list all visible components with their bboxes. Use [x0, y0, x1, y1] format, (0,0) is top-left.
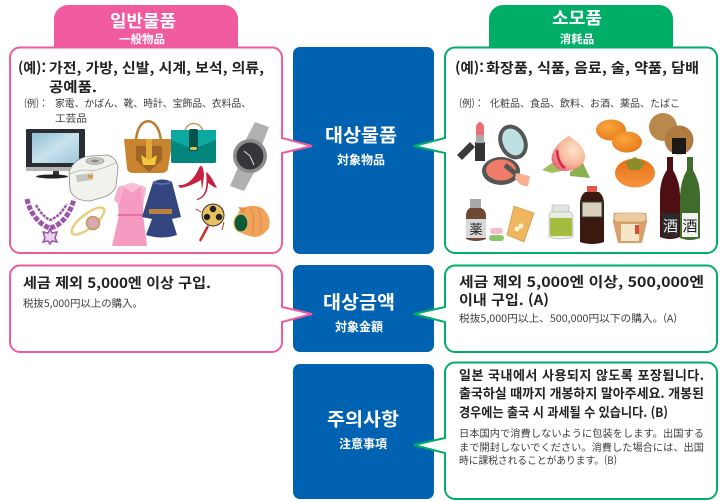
tab: general goods [54, 5, 238, 48]
icon: brown handbag [124, 121, 173, 173]
example text: Korean: 가전, 가방, 신발, 시계, 보석, 의류, [49, 58, 264, 78]
tab: general goods: 일반물품 [110, 7, 176, 32]
precaution text: Korean line 3: 경우에는 출국 시 과세될 수 있습니다. (B) [459, 402, 668, 421]
icon: blue dress [142, 180, 181, 238]
icon: sake bottles [660, 157, 700, 240]
tab: consumables [489, 4, 673, 48]
icon: hand drum toy [196, 204, 224, 241]
panel: consumables precautions [414, 362, 717, 499]
example label: Japanese: (例)： [459, 95, 484, 110]
callout: precautions: 注意事項 [339, 435, 387, 452]
icon: supplement packet [507, 206, 534, 242]
icon: pink dress [112, 183, 147, 246]
precaution text: Japanese line 3: 時に課税されることがあります。(B) [459, 452, 617, 467]
example label: Japanese: (例)： [24, 95, 48, 110]
icon: miso container [613, 213, 647, 243]
callout: precautions: 주의사항 [327, 406, 399, 432]
tab: general goods: 一般物品 [119, 31, 165, 47]
amount text: Korean: 세금 제외 5,000엔 이상 구입. [23, 273, 211, 293]
callout: precautions [293, 364, 434, 499]
icon: wristwatch [230, 122, 269, 191]
icon: mandarin oranges [596, 120, 642, 152]
icon: lipstick [457, 122, 485, 161]
icon: persimmon [615, 157, 655, 188]
panel: general goods target items [10, 48, 312, 253]
tab: consumables: 消耗品 [560, 31, 594, 47]
callout: target amount: 대상금액 [323, 289, 395, 315]
precaution text: Japanese line 1: 日本国内で消費しないように包装をします。出国する [459, 425, 704, 440]
precaution text: Korean line 2: 출국하실 때까지 개봉하지 말아주세요. 개봉된 [459, 383, 704, 402]
callout: target items: 対象物品 [337, 151, 385, 168]
amount text: Japanese: 税抜5,000円以上の購入。 [23, 295, 143, 310]
amount text: Japanese: 税抜5,000円以上、500,000円以下の購入。(A) [459, 310, 677, 325]
icon: rice cooker [69, 155, 118, 201]
icon: sake bottles: 酒 [663, 215, 678, 236]
icon: medicine bottle: 薬 [469, 219, 483, 238]
icon: glass jar [549, 205, 573, 239]
icon: rice crackers [649, 113, 694, 154]
icon: medicine bottle [466, 199, 486, 241]
icon: compact mirror and blush [482, 120, 533, 186]
panel: general goods amount [10, 266, 312, 352]
example text: Japanese: 家電、かばん、靴、時計、宝飾品、衣料品、 [55, 95, 251, 110]
precaution text: Korean line 1: 일본 국내에서 사용되지 않도록 포장됩니다. [459, 365, 704, 384]
icon: red high heels [178, 166, 217, 200]
example text: Korean line 2: 공예품. [49, 77, 97, 97]
panel: consumables target items [414, 48, 717, 253]
icon: soy sauce bottle [580, 186, 604, 244]
example text: Korean: 화장품, 식품, 음료, 술, 약품, 담배 [486, 58, 699, 78]
example text: Japanese line 2: 工芸品 [55, 110, 87, 125]
example label: Korean: (예): [18, 58, 46, 78]
example label: Korean: (예): [455, 58, 484, 78]
amount text: Korean line 1: 세금 제외 5,000엔 이상, 500,000엔 [459, 272, 704, 292]
callout: target items [293, 47, 434, 254]
callout: target items: 대상물품 [325, 122, 397, 148]
callout: target amount: 対象金額 [335, 318, 383, 335]
icon: television [26, 129, 85, 178]
callout: target amount [293, 265, 434, 352]
icon: peach [542, 136, 590, 178]
icon: teal bag [171, 124, 216, 163]
panel: consumables amount [414, 266, 717, 352]
icon: sake bottles: 酒 [682, 215, 698, 236]
icon: ring [68, 203, 108, 239]
precaution text: Japanese line 2: まで開封しないでください。消費した場合には、出国 [459, 439, 704, 454]
icon: piggy bank [234, 206, 270, 237]
amount text: Korean line 2: 이내 구입. (A) [459, 290, 549, 310]
tab: consumables: 소모품 [552, 4, 602, 29]
icon: pills [489, 228, 504, 241]
example text: Japanese: 化粧品、食品、飲料、お酒、薬品、たばこ [490, 95, 680, 110]
icon: necklace [27, 199, 74, 244]
